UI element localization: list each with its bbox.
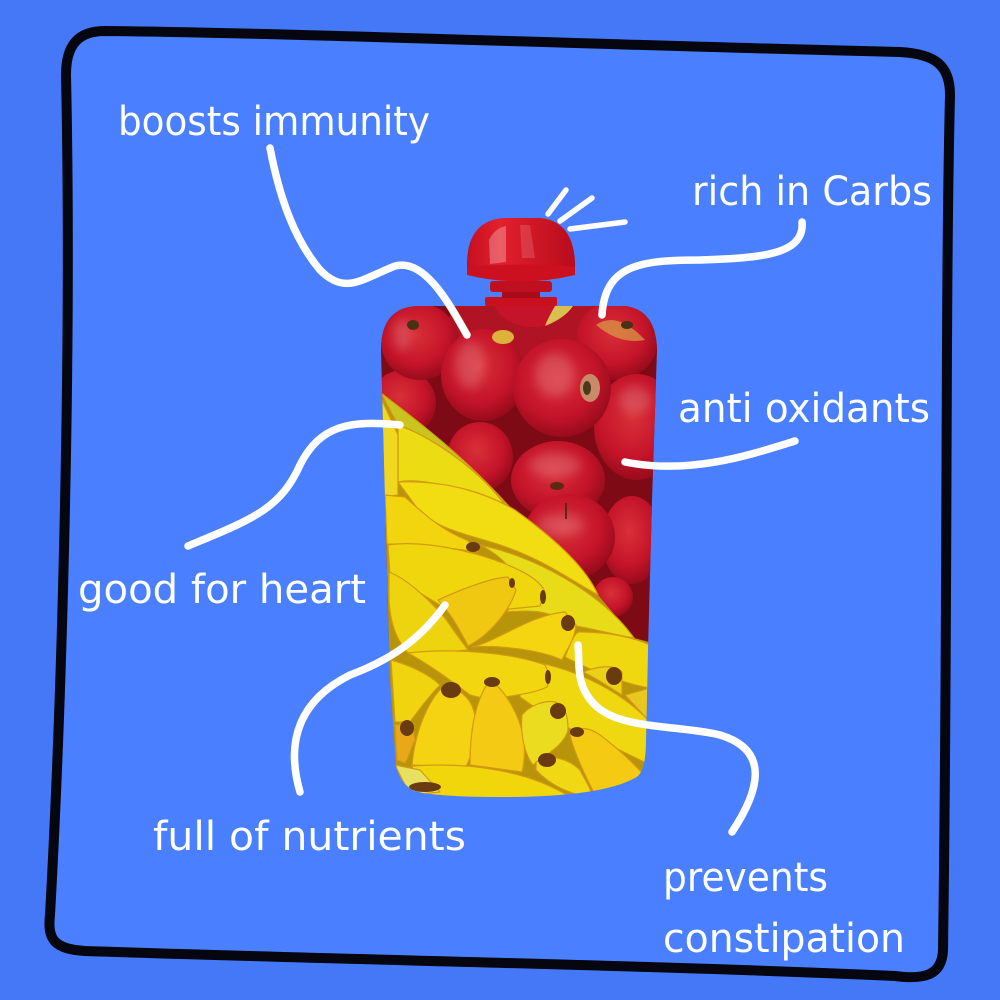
pouch contents	[381, 306, 657, 797]
callout: prevents constipation: constipation	[663, 916, 905, 962]
red cap	[467, 218, 575, 306]
bananas	[381, 393, 660, 800]
apples	[381, 306, 657, 650]
cap motion lines	[548, 190, 625, 229]
callout: good for heart: good for heart	[78, 567, 366, 613]
callout: anti oxidants: anti oxidants	[678, 386, 930, 432]
callout: anti oxidants	[625, 386, 930, 466]
pouch	[381, 218, 657, 797]
callout: good for heart	[78, 423, 400, 613]
callout: boosts immunity	[118, 99, 467, 335]
callout: prevents constipation	[578, 645, 905, 962]
callout: prevents constipation: prevents	[663, 855, 828, 901]
callout: rich in carbs: rich in Carbs	[692, 169, 932, 215]
callout: full of nutrients	[153, 605, 466, 860]
callout: boosts immunity: boosts immunity	[118, 99, 430, 145]
callout: full of nutrients: full of nutrients	[153, 814, 466, 860]
callout: rich in carbs	[602, 169, 932, 315]
